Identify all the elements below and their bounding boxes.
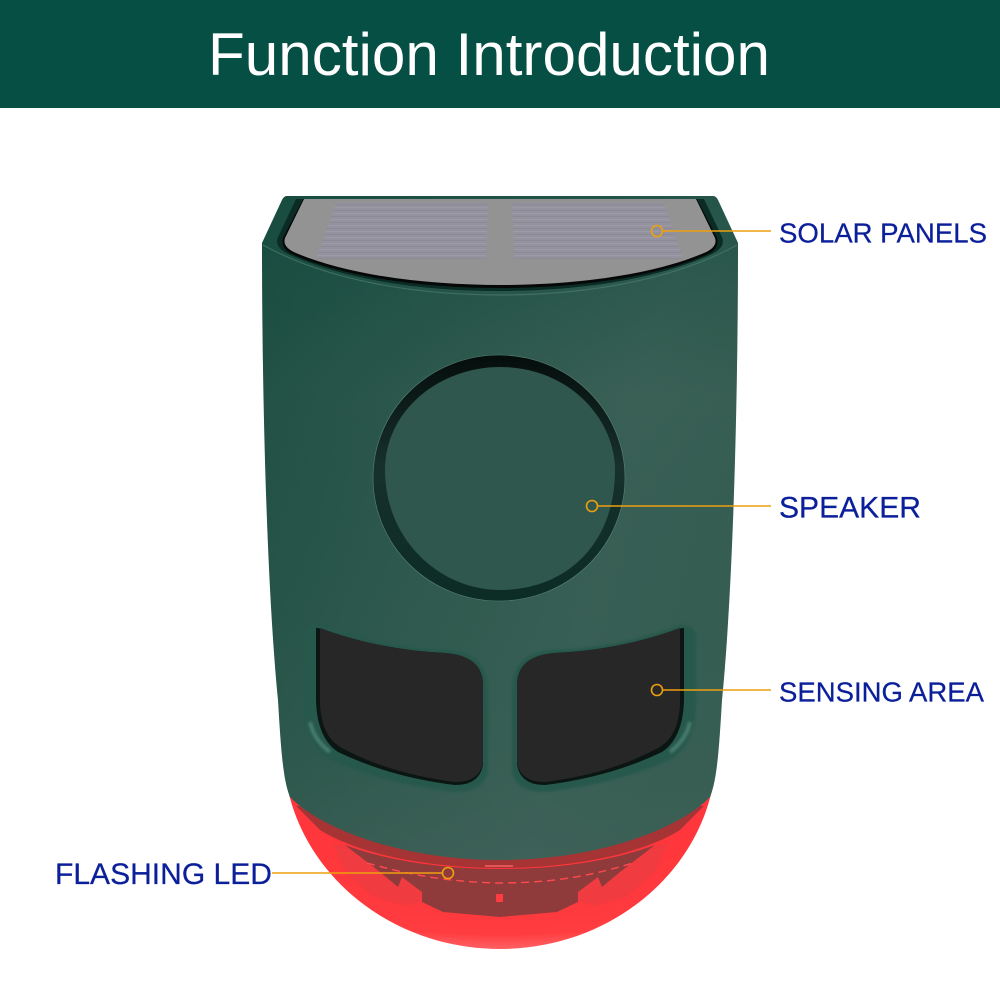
callout: sensing area bbox=[652, 676, 985, 708]
right sensor bbox=[512, 625, 696, 792]
LED circuit board bbox=[345, 845, 655, 917]
title: Function Introduction bbox=[208, 21, 770, 88]
red LED dome bbox=[288, 790, 712, 949]
dark band under housing bbox=[296, 800, 704, 868]
speaker bbox=[373, 355, 625, 601]
callout: flashing LED bbox=[55, 858, 454, 891]
header band bbox=[0, 0, 1000, 108]
callout: speaker: SPEAKER bbox=[779, 492, 921, 524]
sensing windows bbox=[304, 625, 696, 792]
callout: speaker bbox=[586, 492, 921, 524]
callout: flashing LED: FLASHING LED bbox=[55, 858, 272, 891]
housing rim highlight bbox=[263, 245, 737, 295]
callout: sensing area: SENSING AREA bbox=[779, 676, 985, 708]
callout: solar panels bbox=[652, 218, 987, 248]
green housing bbox=[262, 196, 738, 860]
speckled inner reflector bbox=[332, 843, 425, 906]
callout: solar panels: SOLAR PANELS bbox=[779, 218, 987, 248]
solar panels bbox=[277, 199, 723, 291]
product: solar alarm device bbox=[262, 196, 738, 949]
left sensor bbox=[304, 625, 488, 792]
